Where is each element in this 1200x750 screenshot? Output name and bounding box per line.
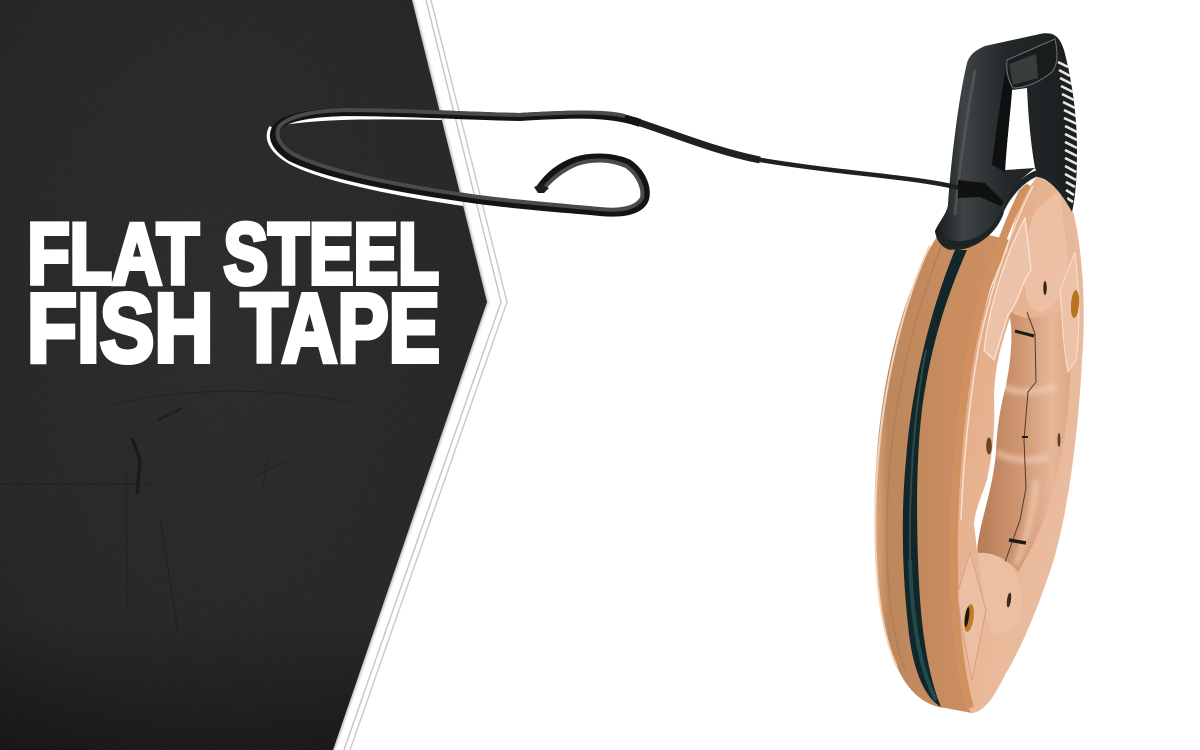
icon: fish tape reel (874, 33, 1084, 713)
handle grip recess (1007, 39, 1057, 88)
title line 2 (27, 274, 440, 382)
tape white edge on dark panel (271, 117, 470, 203)
reel groove with tape (903, 250, 967, 707)
handle inner cut (992, 72, 1012, 172)
tape end at handle (958, 180, 1004, 206)
tape top shine (278, 110, 642, 210)
hook tip (534, 184, 549, 193)
panel: dark chevron (0, 0, 500, 750)
handle collar (935, 170, 1072, 250)
handle (935, 33, 1077, 250)
title line 1: FLAT (28, 206, 199, 302)
mounting holes (1070, 290, 1080, 318)
title line 2: FISH (27, 274, 214, 382)
title line 1: STEEL (224, 206, 439, 302)
textured face panels (984, 218, 1031, 360)
tape body (755, 159, 1003, 204)
hub slit lines (1004, 312, 1036, 565)
tape loop body (274, 112, 646, 213)
hub highlight (996, 385, 1056, 565)
hub interior (977, 310, 1070, 572)
tape mid section (625, 118, 760, 160)
handle wide highlight (955, 70, 975, 215)
reel rim (874, 225, 1010, 713)
title line 1 (28, 206, 439, 302)
title (27, 206, 440, 382)
title line 2: TAPE (240, 274, 440, 382)
reel face (953, 177, 1084, 713)
handle grip ridges (1058, 62, 1077, 202)
hub lobe bottom (978, 553, 1023, 636)
center hole (974, 318, 1011, 550)
face inner edge band (954, 184, 1027, 708)
face hub lobe top (1020, 190, 1068, 312)
rim left highlight (875, 245, 930, 667)
chevron outline lines (344, 0, 507, 750)
icon: steel tape hook (271, 110, 1004, 213)
